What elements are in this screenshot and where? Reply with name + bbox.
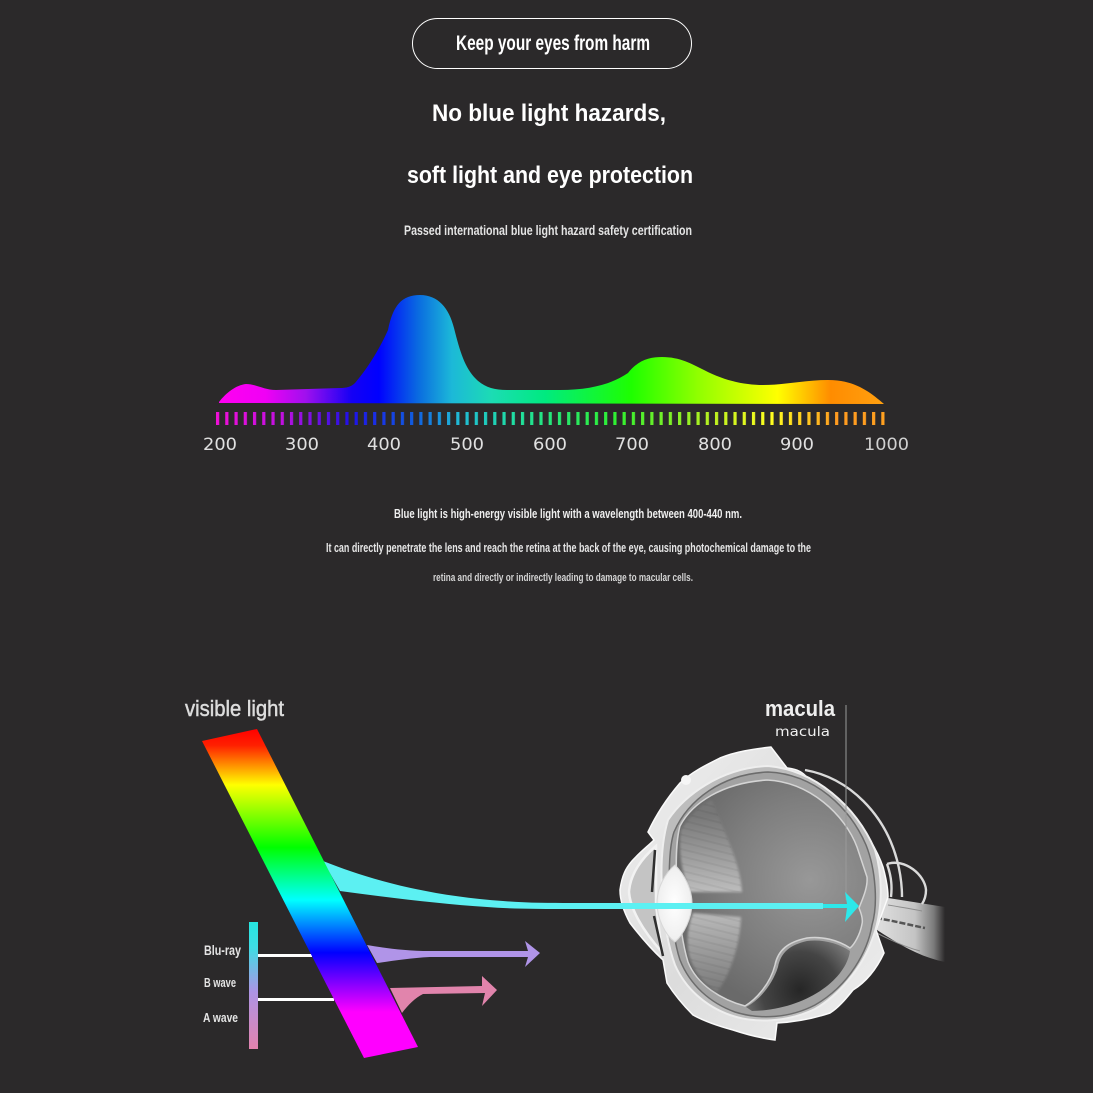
vitreous bbox=[676, 780, 867, 1006]
arrow: cyan blue-light ray to macula bbox=[323, 861, 859, 922]
label: macula: macula bbox=[775, 724, 830, 740]
eye outer wall bbox=[620, 747, 888, 1040]
wave band labels bbox=[203, 942, 241, 1025]
label: macula: macula bbox=[765, 696, 836, 721]
text block: blue light explanation: Blue light is high-energy visible light with a wavelength between 400-440 nm. bbox=[394, 507, 742, 521]
arrow: purple B wave bbox=[367, 941, 540, 967]
badge: Keep your eyes from harm bbox=[412, 18, 692, 68]
wavelength tick marks bbox=[216, 412, 885, 425]
optic nerve layer lines bbox=[875, 905, 922, 951]
subheading: certification: Passed international blue light hazard safety certification bbox=[404, 222, 692, 238]
arrow tip bbox=[823, 892, 859, 922]
heading: main title bbox=[407, 100, 693, 189]
prism beam: visible spectrum bbox=[202, 729, 418, 1058]
heading: main title: soft light and eye protection bbox=[407, 162, 693, 189]
wavelength axis labels: 300 bbox=[285, 435, 319, 454]
wave band labels: Blu-ray bbox=[204, 942, 241, 958]
extraocular muscle arc bbox=[805, 770, 926, 904]
lens bbox=[657, 865, 692, 942]
wavelength axis labels: 600 bbox=[533, 435, 567, 454]
heading: main title: No blue light hazards, bbox=[432, 100, 666, 127]
small white spot bbox=[681, 775, 691, 785]
label: visible light: visible light bbox=[185, 696, 284, 721]
wave band labels: B wave bbox=[204, 976, 236, 990]
label: macula bbox=[765, 696, 836, 740]
arrow: pink A wave bbox=[390, 976, 497, 1013]
optic nerve core line bbox=[860, 917, 925, 928]
wavelength axis labels: 700 bbox=[615, 435, 649, 454]
wavelength axis labels: 900 bbox=[780, 435, 814, 454]
diagram: eye cross-section bbox=[620, 705, 945, 1040]
connector lines from scale bar to beam bbox=[257, 954, 334, 1001]
wavelength axis labels: 500 bbox=[450, 435, 484, 454]
wavelength axis labels: 400 bbox=[367, 435, 401, 454]
macula pointer line bbox=[845, 705, 847, 900]
ciliary body upper bbox=[680, 800, 742, 892]
dark lower chamber bbox=[746, 940, 850, 1011]
text block: blue light explanation: retina and directly or indirectly leading to damage to macular cells. bbox=[433, 572, 693, 584]
wavelength axis labels: 1000 bbox=[864, 435, 909, 454]
wavelength axis labels: 800 bbox=[698, 435, 732, 454]
scale bar: wave bands bbox=[249, 922, 258, 1049]
wave band labels: A wave bbox=[203, 1010, 238, 1025]
spectrum area curve bbox=[219, 295, 884, 404]
badge: Keep your eyes from harm: Keep your eyes from harm bbox=[456, 32, 650, 55]
cornea anterior chamber bbox=[629, 846, 662, 952]
text block: blue light explanation: It can directly penetrate the lens and reach the retina at the back of the eye, causing photochemical damage to the bbox=[326, 541, 811, 555]
sclera shade band bbox=[662, 766, 881, 1021]
choroid ring bbox=[669, 772, 875, 1017]
iris bbox=[652, 850, 663, 956]
chart: light spectrum curve bbox=[203, 295, 909, 454]
infographic canvas bbox=[184, 18, 944, 1058]
text block: blue light explanation bbox=[326, 507, 811, 584]
ciliary body lower bbox=[688, 913, 741, 992]
wavelength axis labels bbox=[203, 435, 909, 454]
wavelength axis labels: 200 bbox=[203, 435, 237, 454]
optic nerve bbox=[866, 895, 945, 962]
